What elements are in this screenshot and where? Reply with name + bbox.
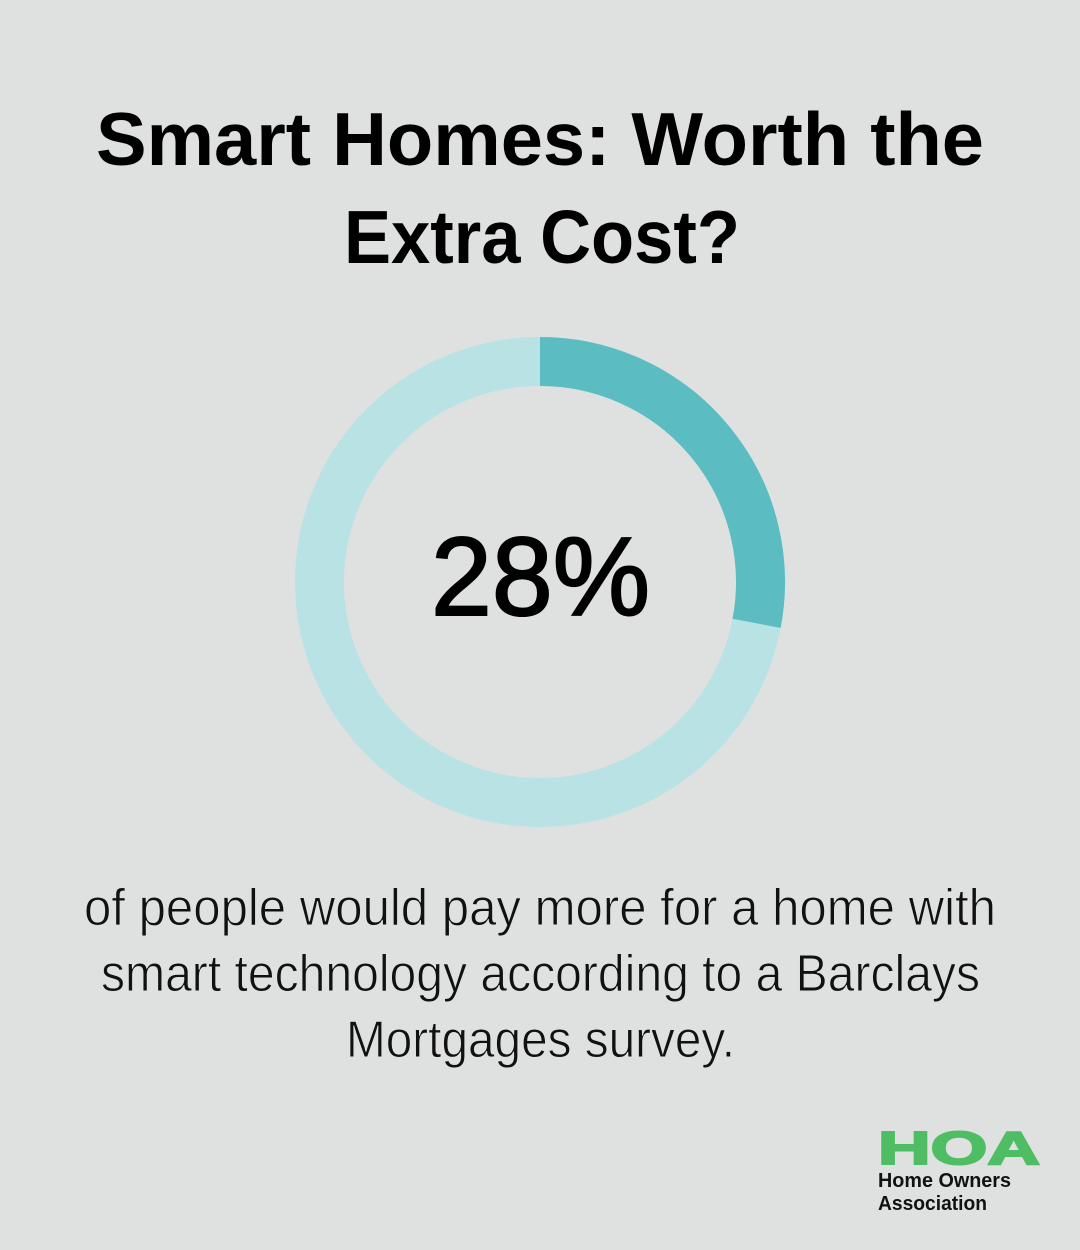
title: Smart Homes: Worth the: [96, 97, 984, 181]
title: [96, 97, 984, 279]
donut chart: 28%: [320, 361, 761, 802]
logo: Home Owners Association: HOA: [878, 1122, 1040, 1174]
logo: Home Owners Association: Association: [878, 1193, 987, 1215]
logo: Home Owners Association: Home Owners: [878, 1170, 1011, 1192]
description text: of people would pay more for a home with: [84, 879, 996, 937]
donut value: 28%: [431, 515, 650, 639]
description text: [84, 879, 996, 1069]
title: Extra Cost?: [344, 195, 740, 279]
logo: Home Owners Association: [878, 1122, 1040, 1215]
description text: Mortgages survey.: [346, 1011, 735, 1069]
description text: smart technology according to a Barclays: [101, 945, 980, 1003]
